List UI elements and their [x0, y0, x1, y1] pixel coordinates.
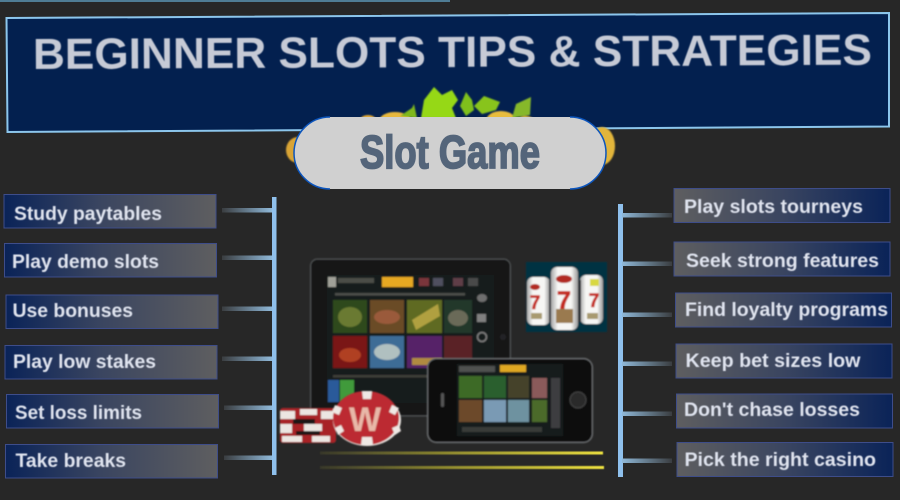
title: BEGINNER SLOTS TIPS & STRATEGIES [33, 26, 872, 79]
tip 1: Play slots tourneys [684, 197, 863, 218]
tip 6 [6, 444, 218, 478]
panel: right tips [674, 188, 893, 476]
yellow lines [320, 452, 604, 469]
sevens: 7 [557, 287, 571, 315]
tip 3: Use bonuses [12, 301, 133, 322]
tip 4 [676, 344, 892, 378]
icon: slot reels: 7 [589, 291, 599, 312]
tip 4: Keep bet sizes low [686, 351, 861, 372]
tip 2 [674, 242, 890, 276]
tip 1 [674, 188, 890, 222]
tip 1 [4, 194, 216, 228]
top strip [0, 0, 450, 2]
tip 3 [6, 295, 218, 328]
tip 6: Pick the right casino [684, 450, 876, 471]
tip 4: Play low stakes [13, 352, 156, 373]
icon: coins and leaves behind pill [286, 87, 615, 165]
tip 5 [676, 394, 892, 428]
tip 2 [4, 244, 216, 277]
tip 5: Don't chase losses [684, 400, 860, 421]
title banner [6, 13, 889, 132]
icon: tablet [310, 259, 510, 416]
icon: phone [428, 358, 592, 442]
icon: slot reels: 7 [530, 293, 540, 314]
tip 1: Study paytables [14, 204, 162, 225]
left connector bracket [222, 197, 276, 475]
tip 2: Seek strong features [686, 251, 879, 272]
pill: Slot Game [294, 117, 606, 189]
icon: slot reels [526, 262, 607, 332]
pill label: Slot Game [360, 126, 540, 178]
tip 6: Take breaks [16, 451, 126, 472]
icon: casino chips [280, 391, 401, 446]
tip 5: Set loss limits [15, 403, 142, 424]
tip 5 [6, 394, 218, 428]
panel: left tips [4, 194, 218, 478]
tip 3: Find loyalty programs [685, 300, 888, 321]
right connector bracket [618, 204, 672, 477]
tip 3 [676, 293, 892, 327]
chip W: W [349, 401, 382, 439]
tip 4 [5, 346, 217, 379]
tip 2: Play demo slots [12, 252, 159, 273]
tip 6 [677, 442, 893, 476]
